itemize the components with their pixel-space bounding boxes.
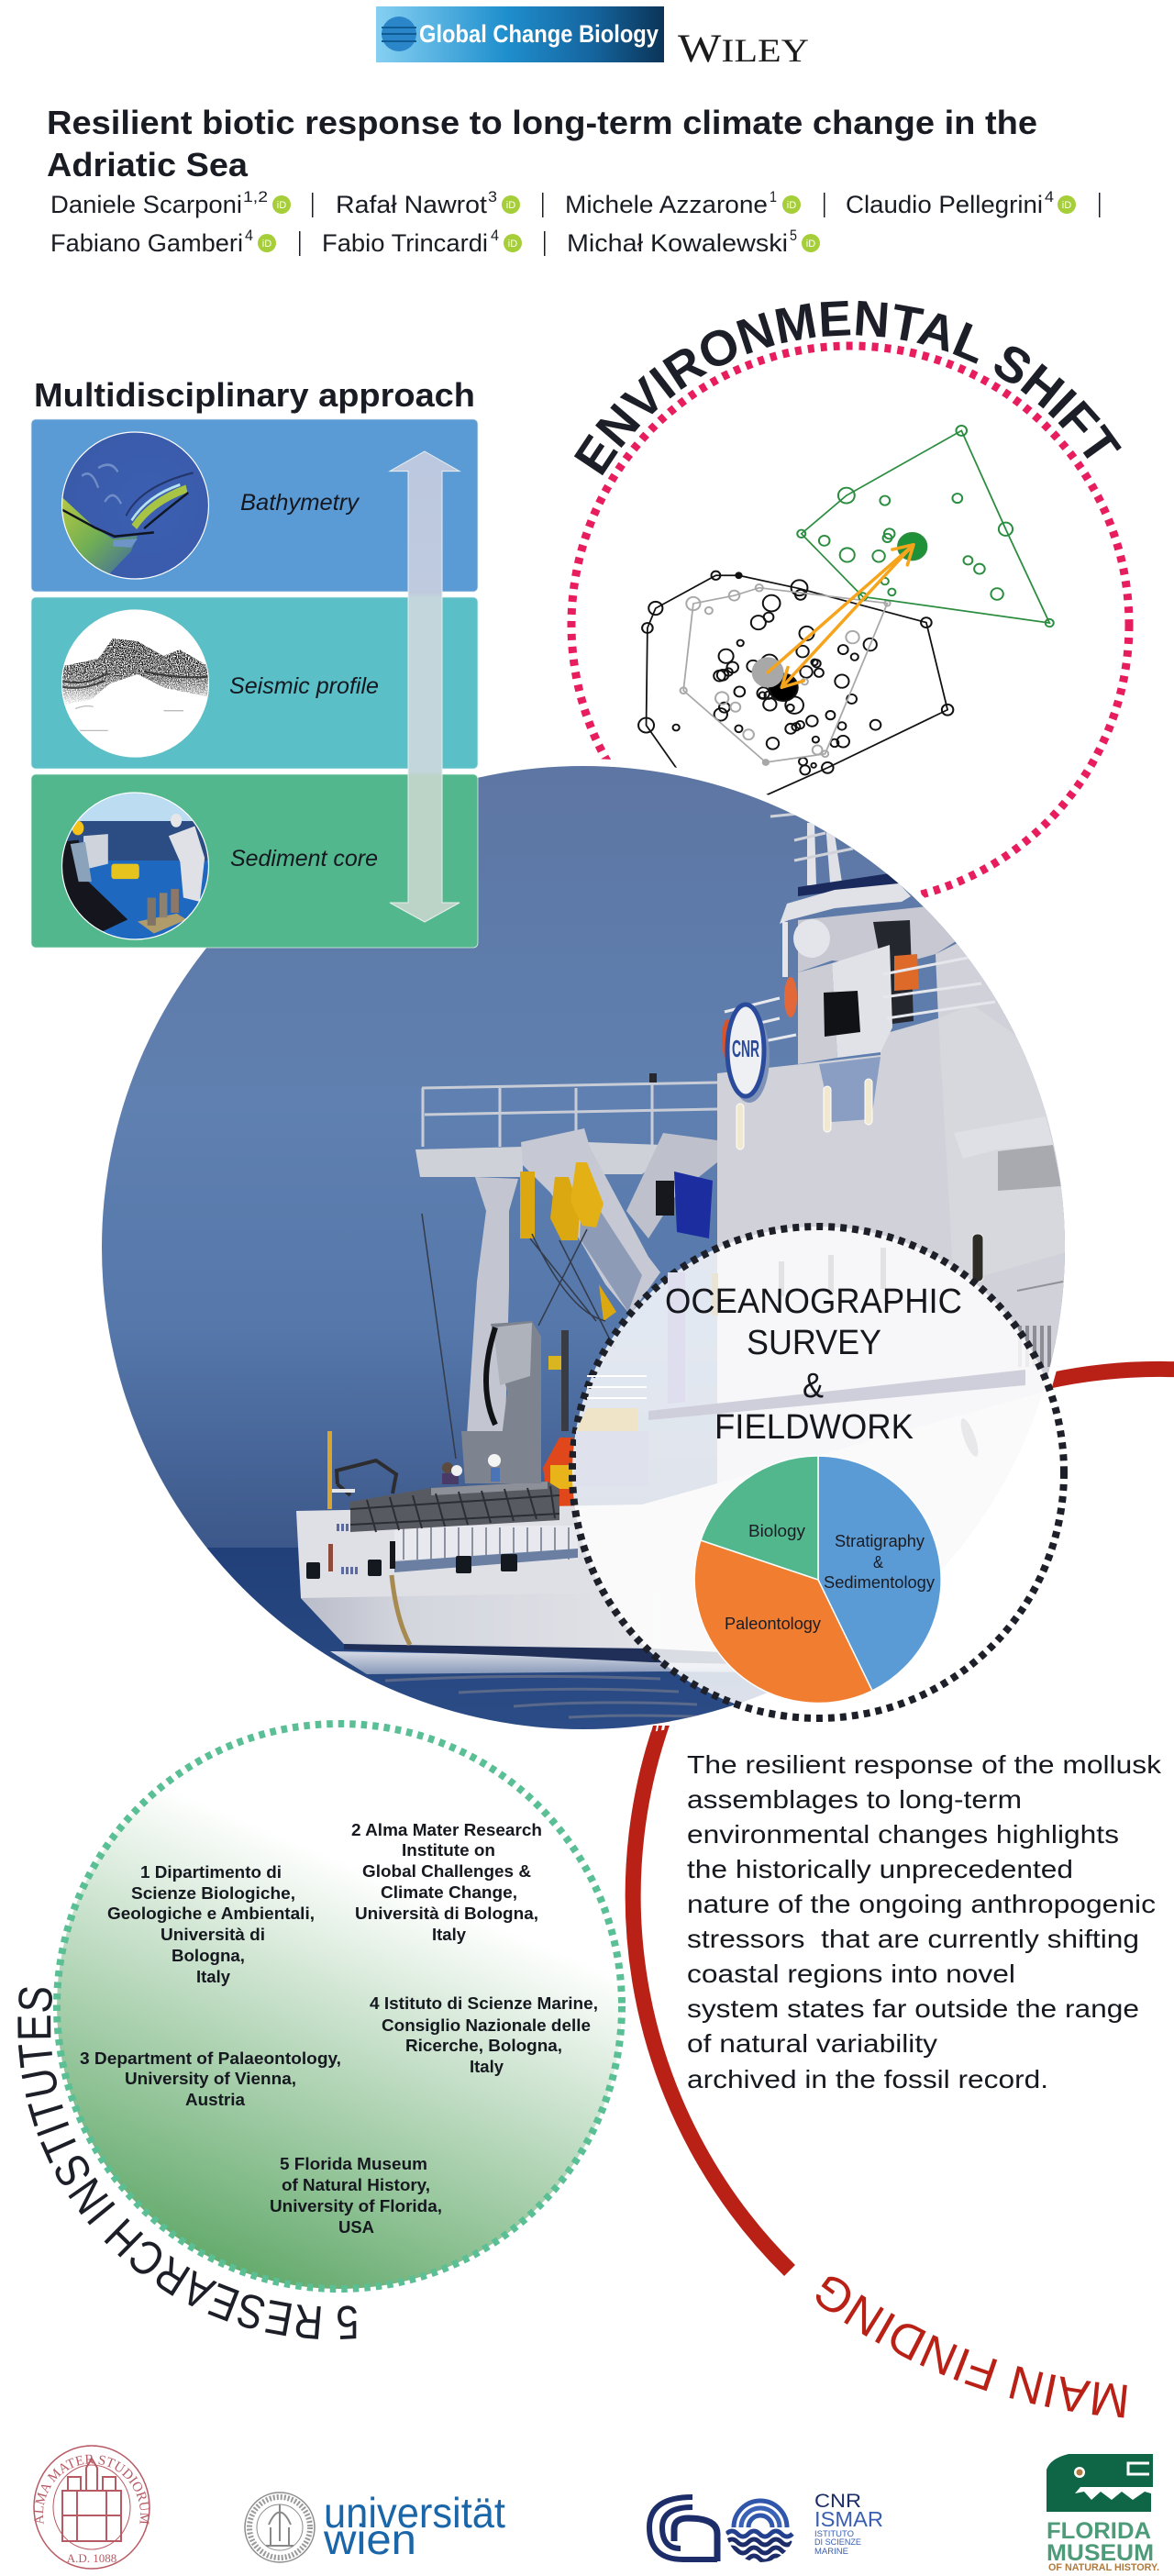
text block: main finding: the historically unprecedented: [687, 1855, 1073, 1883]
panel: oceanographic survey and fieldwork: [572, 1227, 1064, 1718]
title: [47, 104, 1037, 183]
label: bathymetry: Bathymetry: [240, 490, 360, 516]
heading: oceanographic survey & fieldwork: &: [803, 1367, 824, 1405]
logo: University of Vienna: universität: [324, 2489, 505, 2537]
image: bathymetry map: [61, 432, 208, 579]
logo: Florida Museum of Natural History: MUSEUM: [1047, 2540, 1154, 2566]
institute 4: Italy: [470, 2057, 504, 2076]
photo: research vessel: [92, 757, 1101, 1736]
institute 2: Climate Change,: [381, 1882, 517, 1902]
institute 3: [80, 2049, 341, 2109]
authors: Claudio Pellegrini: [846, 191, 1043, 218]
logo: CNR ISMAR: ISMAR: [814, 2507, 883, 2531]
green group: [797, 426, 1054, 627]
label: sediment core: Sediment core: [230, 846, 378, 872]
label: seismic profile: Seismic profile: [229, 673, 379, 699]
text block: main finding: environmental changes highlights: [687, 1820, 1119, 1849]
title: Adriatic Sea: [47, 146, 249, 183]
institute 3: Austria: [185, 2090, 246, 2109]
panel: sediment core: [31, 774, 478, 948]
institute 2: [351, 1820, 542, 1944]
authors: 1,2: [243, 188, 268, 205]
authors: 3: [488, 188, 497, 205]
arc heading: environmental shift: ENVIRONMENTAL SHIFT: [574, 301, 1122, 475]
institute 4: Consiglio Nazionale delle: [382, 2015, 591, 2035]
gantry crane: [415, 1073, 717, 1523]
grey group: [681, 584, 891, 765]
institute 2: Italy: [432, 1925, 467, 1944]
short red dashes below the photo: [650, 1726, 670, 1735]
arrow: double-headed: [390, 451, 460, 922]
arc heading: 5 research institutes: 5 RESEARCH INSTITUTES: [17, 1987, 357, 2339]
institute 1: Scienze Biologiche,: [131, 1883, 295, 1903]
slice: biology: [701, 1456, 818, 1580]
dashed ring: environmental shift: [571, 346, 1129, 904]
logo: CNR ISMAR: CNR: [814, 2491, 861, 2512]
institute 5: USA: [338, 2217, 374, 2237]
slice: stratigraphy and sedimentology: [818, 1456, 941, 1691]
water reflection: [330, 1651, 735, 1719]
panel: research institutes: [17, 1720, 626, 2339]
pie labels: Sedimentology: [824, 1573, 935, 1592]
authors: Fabiano Gamberi: [50, 229, 243, 257]
authors: iD: [508, 239, 517, 250]
panel: environmental shift: [567, 301, 1134, 900]
authors: 4: [491, 227, 499, 244]
pie labels: Paleontology: [725, 1615, 821, 1633]
logo: University of Vienna: [245, 2489, 505, 2563]
ship mast: [770, 813, 908, 896]
logo: University of Bologna seal: ALMA MATER STUDIORUM: [34, 2455, 149, 2525]
institute 4: Ricerche, Bologna,: [405, 2036, 562, 2055]
institute 3: University of Vienna,: [125, 2069, 296, 2088]
white halo around photo: [98, 762, 1069, 1733]
red arc: main finding: [633, 1369, 1174, 2271]
text block: main finding: archived in the fossil record.: [687, 2065, 1048, 2093]
institute 1: 1 Dipartimento di: [140, 1862, 282, 1882]
institute 1: Geologiche e Ambientali,: [107, 1904, 315, 1923]
institute 5: of Natural History,: [282, 2175, 430, 2194]
authors: Daniele Scarponi: [50, 191, 242, 218]
ship hull: [296, 1431, 985, 1664]
text block: main finding: stressors that are currently shifting: [687, 1925, 1139, 1953]
institute list: [80, 1820, 598, 2237]
journal logo: Global Change Biology: Global Change Biology: [419, 20, 659, 48]
heading: oceanographic survey & fieldwork: FIELDWORK: [714, 1408, 914, 1447]
pie labels: [725, 1522, 935, 1633]
heading: multidisciplinary approach: Multidisciplinary approach: [34, 376, 475, 414]
authors: iD: [806, 239, 815, 250]
logo: University of Vienna: wien: [323, 2515, 416, 2563]
institute 1: Bologna,: [172, 1946, 245, 1965]
panel: bathymetry: [31, 419, 478, 592]
authors: 1: [770, 188, 777, 205]
authors: iD: [277, 200, 286, 211]
institute 2: Global Challenges &: [362, 1861, 531, 1881]
authors: iD: [787, 200, 796, 211]
black group: [638, 572, 953, 795]
text block: main finding: [687, 1750, 1162, 2093]
institute 3: 3 Department of Palaeontology,: [80, 2049, 341, 2068]
publisher logo: Wiley: WILEY: [678, 28, 809, 71]
pie chart: disciplines: [694, 1456, 941, 1704]
authors: iD: [506, 200, 515, 211]
authors: 4: [1045, 188, 1054, 205]
authors: 5: [790, 227, 797, 244]
ship details seen through the lens: [576, 1248, 1025, 1486]
institute 5: [270, 2154, 442, 2237]
ship superstructure: [717, 883, 1065, 1483]
heading: oceanographic survey & fieldwork: [665, 1282, 962, 1447]
image: coring on deck: [62, 793, 208, 939]
gradient circle with dashed ring: [57, 1724, 622, 2289]
logo on ship: CNR: [727, 1005, 770, 1103]
heading: oceanographic survey & fieldwork: SURVEY: [747, 1324, 881, 1362]
slice: paleontology: [694, 1540, 872, 1704]
authors: iD: [262, 239, 271, 250]
institute 2: Università di Bologna,: [355, 1904, 538, 1923]
logo on ship: CNR: CNR: [732, 1035, 759, 1062]
authors: Rafał Nawrot: [336, 191, 488, 218]
authors: Michele Azzarone: [565, 191, 768, 218]
text block: main finding: The resilient response of the mollusk: [687, 1750, 1162, 1779]
logo: CNR ISMAR: [649, 2491, 883, 2561]
pie labels: &: [873, 1553, 883, 1571]
institute 5: 5 Florida Museum: [280, 2154, 427, 2173]
institute 1: [107, 1862, 315, 1986]
journal logo: Global Change Biology: [376, 6, 664, 62]
arc heading: main finding: MAIN FINDING: [816, 2277, 1127, 2418]
image: seismic section: [55, 610, 211, 757]
institute 5: University of Florida,: [270, 2196, 442, 2215]
panel: multidisciplinary approach: [31, 376, 478, 948]
panel: seismic profile: [31, 597, 478, 769]
pie labels: Biology: [748, 1522, 805, 1540]
logo: Florida Museum of Natural History: OF NATURAL HISTORY.: [1048, 2562, 1159, 2573]
authors: 4: [245, 227, 253, 244]
pie labels: Stratigraphy: [835, 1532, 925, 1550]
institute 2: 2 Alma Mater Research: [351, 1820, 542, 1839]
logo: Florida Museum of Natural History: FLORIDA: [1047, 2518, 1151, 2544]
title: Resilient biotic response to long-term climate change in the: [47, 104, 1037, 141]
text block: main finding: coastal regions into novel: [687, 1960, 1015, 1988]
text block: main finding: nature of the ongoing anthropogenic: [687, 1890, 1156, 1918]
logo: CNR ISMAR: DI SCIENZE: [814, 2537, 861, 2547]
logo: CNR ISMAR: MARINE: [814, 2547, 848, 2556]
text block: main finding: system states far outside the range: [687, 1994, 1139, 2023]
authors: [50, 188, 1101, 257]
logo: CNR ISMAR: ISTITUTO: [814, 2529, 854, 2538]
institute 1: Italy: [196, 1967, 231, 1986]
logo: University of Bologna seal: [33, 2445, 150, 2570]
scatter plot: ordination: [638, 426, 1054, 795]
logo: Florida Museum of Natural History: [1047, 2454, 1159, 2573]
institute 1: Università di: [161, 1925, 265, 1944]
authors: iD: [1062, 200, 1071, 211]
heading: oceanographic survey & fieldwork: OCEANOGRAPHIC: [665, 1282, 962, 1321]
dashed lens circle: [572, 1227, 1064, 1718]
logo: University of Bologna seal: A.D. 1088: [67, 2551, 116, 2565]
authors: Michał Kowalewski: [567, 229, 788, 257]
institute 4: 4 Istituto di Scienze Marine,: [370, 1993, 598, 2013]
arrows: shift and return: [768, 545, 914, 687]
text block: main finding: assemblages to long-term: [687, 1785, 1022, 1814]
text block: main finding: of natural variability: [687, 2029, 937, 2058]
authors: Fabio Trincardi: [322, 229, 488, 257]
institute 4: [370, 1993, 598, 2076]
institute 2: Institute on: [402, 1840, 495, 1860]
